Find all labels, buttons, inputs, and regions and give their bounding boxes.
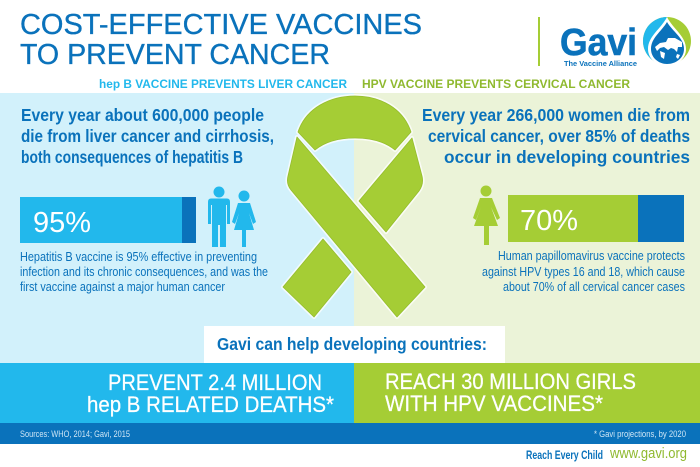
callout: Gavi can help: Gavi can help developing countries: xyxy=(217,334,487,354)
text: cervical cancer statistic xyxy=(422,105,690,167)
icon: woman green xyxy=(473,186,500,245)
bar: 95%: 95% xyxy=(33,207,91,239)
bar: 95% xyxy=(20,197,196,243)
text: liver cancer statistic: Every year about 600,000 people xyxy=(21,105,264,125)
website: www.gavi.org xyxy=(609,445,687,462)
panel: reach girls: WITH HPV VACCINES* xyxy=(385,391,603,416)
callout: Gavi can help xyxy=(204,326,505,363)
logo: Gavi: Gavi xyxy=(560,22,637,64)
icon: woman xyxy=(232,190,256,247)
text: liver cancer statistic: die from liver cancer and cirrhosis, xyxy=(21,126,274,146)
logo: Gavi xyxy=(538,17,691,68)
panel: prevent deaths xyxy=(0,363,354,423)
icon: awareness ribbon xyxy=(283,96,425,317)
tagline: Reach Every Child xyxy=(526,450,603,462)
text: hep B vaccine note: first vaccine against a major human cancer xyxy=(20,280,225,294)
panel: reach girls xyxy=(354,363,700,423)
text: liver cancer statistic: both consequences of hepatitis B xyxy=(21,147,243,167)
subheading: HPV: HPV VACCINE PREVENTS CERVICAL CANCER xyxy=(362,77,630,91)
bar: 70%: 70% xyxy=(520,205,578,237)
icon: man xyxy=(208,186,230,247)
bar: 70% xyxy=(508,195,684,242)
logo: Gavi: The Vaccine Alliance xyxy=(564,59,637,68)
text: hep B vaccine note: infection and its chronic consequences, and was the xyxy=(20,265,268,279)
title xyxy=(20,9,422,71)
text: liver cancer statistic xyxy=(21,105,274,167)
text: cervical cancer statistic: occur in developing countries xyxy=(444,147,690,167)
text: hep B vaccine note: Hepatitis B vaccine is 95% effective in preventing xyxy=(20,250,257,264)
subheading: hep B: hep B VACCINE PREVENTS LIVER CANCER xyxy=(99,77,347,91)
footer band: Sources: WHO, 2014; Gavi, 2015 xyxy=(20,429,130,440)
panel: prevent deaths: PREVENT 2.4 MILLION xyxy=(108,370,322,395)
panel: prevent deaths: hep B RELATED DEATHS* xyxy=(87,392,334,417)
panel: HPV background xyxy=(354,93,700,363)
panel: hep B background xyxy=(0,93,354,363)
text: HPV vaccine note xyxy=(482,249,685,294)
text: hep B vaccine note xyxy=(20,250,268,294)
title: TO PREVENT CANCER xyxy=(20,39,330,71)
panel: reach girls: REACH 30 MILLION GIRLS xyxy=(385,369,636,394)
title: COST-EFFECTIVE VACCINES xyxy=(20,9,422,41)
footer band xyxy=(0,423,700,444)
